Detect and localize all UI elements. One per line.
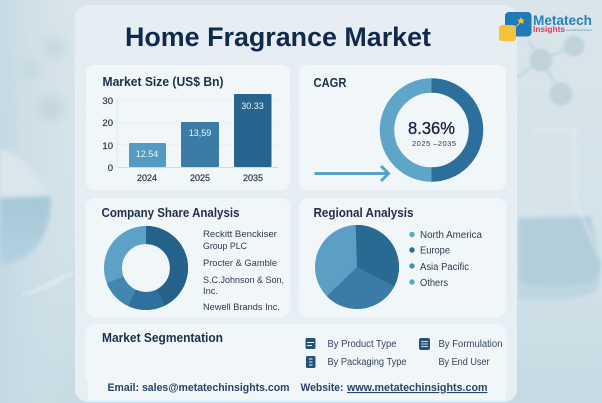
label: product type: By Product Type bbox=[328, 339, 397, 350]
company list: Procter & Gamble bbox=[203, 258, 277, 268]
panel: company share bbox=[86, 198, 290, 317]
legend bbox=[409, 230, 483, 289]
label: packaging type: By Packaging Type bbox=[328, 357, 407, 368]
company list: S.C.Johnson & Son, bbox=[203, 275, 284, 285]
icon: product type bbox=[306, 338, 316, 349]
main card bbox=[75, 5, 517, 402]
panel: regional bbox=[299, 198, 506, 317]
bar chart: 2024 bbox=[137, 173, 157, 183]
panel: market size bbox=[86, 65, 290, 190]
title: Home Fragrance Market bbox=[125, 22, 431, 52]
legend: Others bbox=[420, 278, 448, 289]
CAGR period: 2025 –2035 bbox=[412, 139, 456, 148]
panel: market segmentation bbox=[86, 324, 506, 400]
company list: Reckitt Benckiser bbox=[203, 229, 277, 239]
bar chart: 2035 bbox=[243, 173, 263, 183]
heading: regional: Regional Analysis bbox=[314, 205, 414, 220]
heading: segmentation: Market Segmentation bbox=[102, 330, 223, 345]
bar chart: 13,59 bbox=[189, 128, 211, 138]
bar chart: 12.54 bbox=[136, 149, 158, 159]
label: end user: By End User bbox=[438, 357, 490, 368]
bar chart: 30 bbox=[102, 96, 113, 107]
contact: website: www.metatechinsights.com bbox=[346, 382, 488, 394]
arrow bbox=[314, 166, 388, 181]
icon: formulation bbox=[419, 338, 430, 350]
logo wordmark: Metatech bbox=[533, 13, 592, 28]
legend: North America bbox=[420, 230, 483, 241]
donut: company share bbox=[113, 235, 179, 301]
company list bbox=[203, 229, 284, 312]
logo subtitle: Insights bbox=[533, 24, 565, 34]
right molecule bbox=[518, 36, 584, 105]
heading: market size: Market Size (US$ Bn) bbox=[102, 74, 224, 89]
bar chart: 10 bbox=[102, 141, 113, 152]
left flask bbox=[0, 150, 51, 265]
contact: email: Email: sales@metatechinsights.com bbox=[108, 382, 290, 394]
donut: CAGR bbox=[387, 86, 476, 174]
pie chart bbox=[336, 246, 378, 288]
contact: website: Website: bbox=[300, 382, 344, 394]
bar chart: 20 bbox=[102, 118, 113, 129]
panel: CAGR bbox=[299, 65, 506, 190]
bar chart: 0 bbox=[108, 163, 113, 174]
icon: logo mark bbox=[499, 12, 532, 41]
company list: Inc. bbox=[203, 286, 218, 296]
company list: Newell Brands Inc. bbox=[203, 302, 280, 312]
CAGR value: 8.36% bbox=[408, 118, 455, 138]
bar chart: 2025 bbox=[190, 173, 210, 183]
left blurred molecule bbox=[22, 38, 64, 121]
bar chart bbox=[102, 94, 278, 183]
company list: Group PLC bbox=[203, 241, 247, 251]
heading: company share: Company Share Analysis bbox=[102, 205, 240, 220]
legend: Europe bbox=[420, 246, 451, 256]
label: formulation: By Formulation bbox=[438, 339, 502, 350]
right flask bbox=[518, 130, 602, 300]
bar chart: 30.33 bbox=[241, 101, 264, 111]
dropper bbox=[22, 268, 75, 297]
legend: Asia Pacific bbox=[420, 262, 469, 273]
logo bbox=[499, 12, 593, 41]
icon: packaging type bbox=[306, 356, 316, 368]
heading: CAGR: CAGR bbox=[314, 75, 347, 90]
logo tagline: Consulting Solutions bbox=[566, 29, 593, 32]
